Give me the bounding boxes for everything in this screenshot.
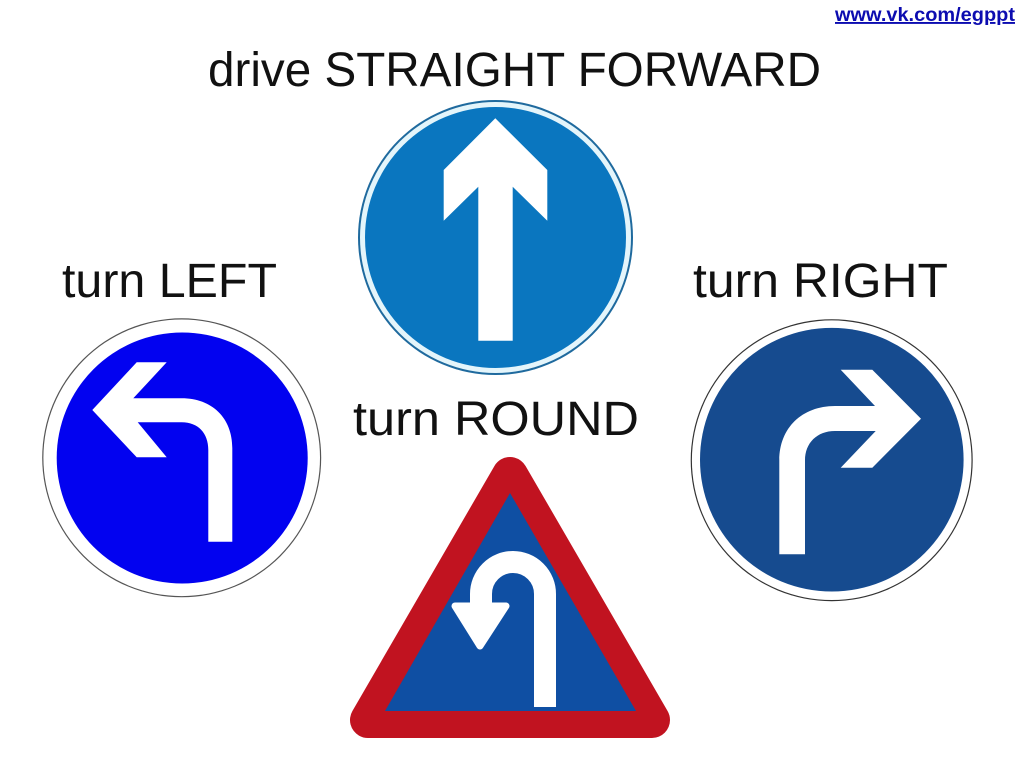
icon: turn round warning triangle bbox=[368, 475, 652, 720]
icon: turn right sign bbox=[691, 319, 973, 601]
icon: straight ahead sign bbox=[358, 100, 633, 375]
source link: www.vk.com/egppt bbox=[834, 5, 1016, 26]
icon: turn left sign bbox=[42, 318, 321, 597]
label: turn left: turn LEFT bbox=[62, 255, 277, 308]
label: turn right: turn RIGHT bbox=[693, 255, 948, 308]
title: drive STRAIGHT FORWARD bbox=[208, 44, 821, 97]
label: turn round: turn ROUND bbox=[353, 393, 639, 446]
